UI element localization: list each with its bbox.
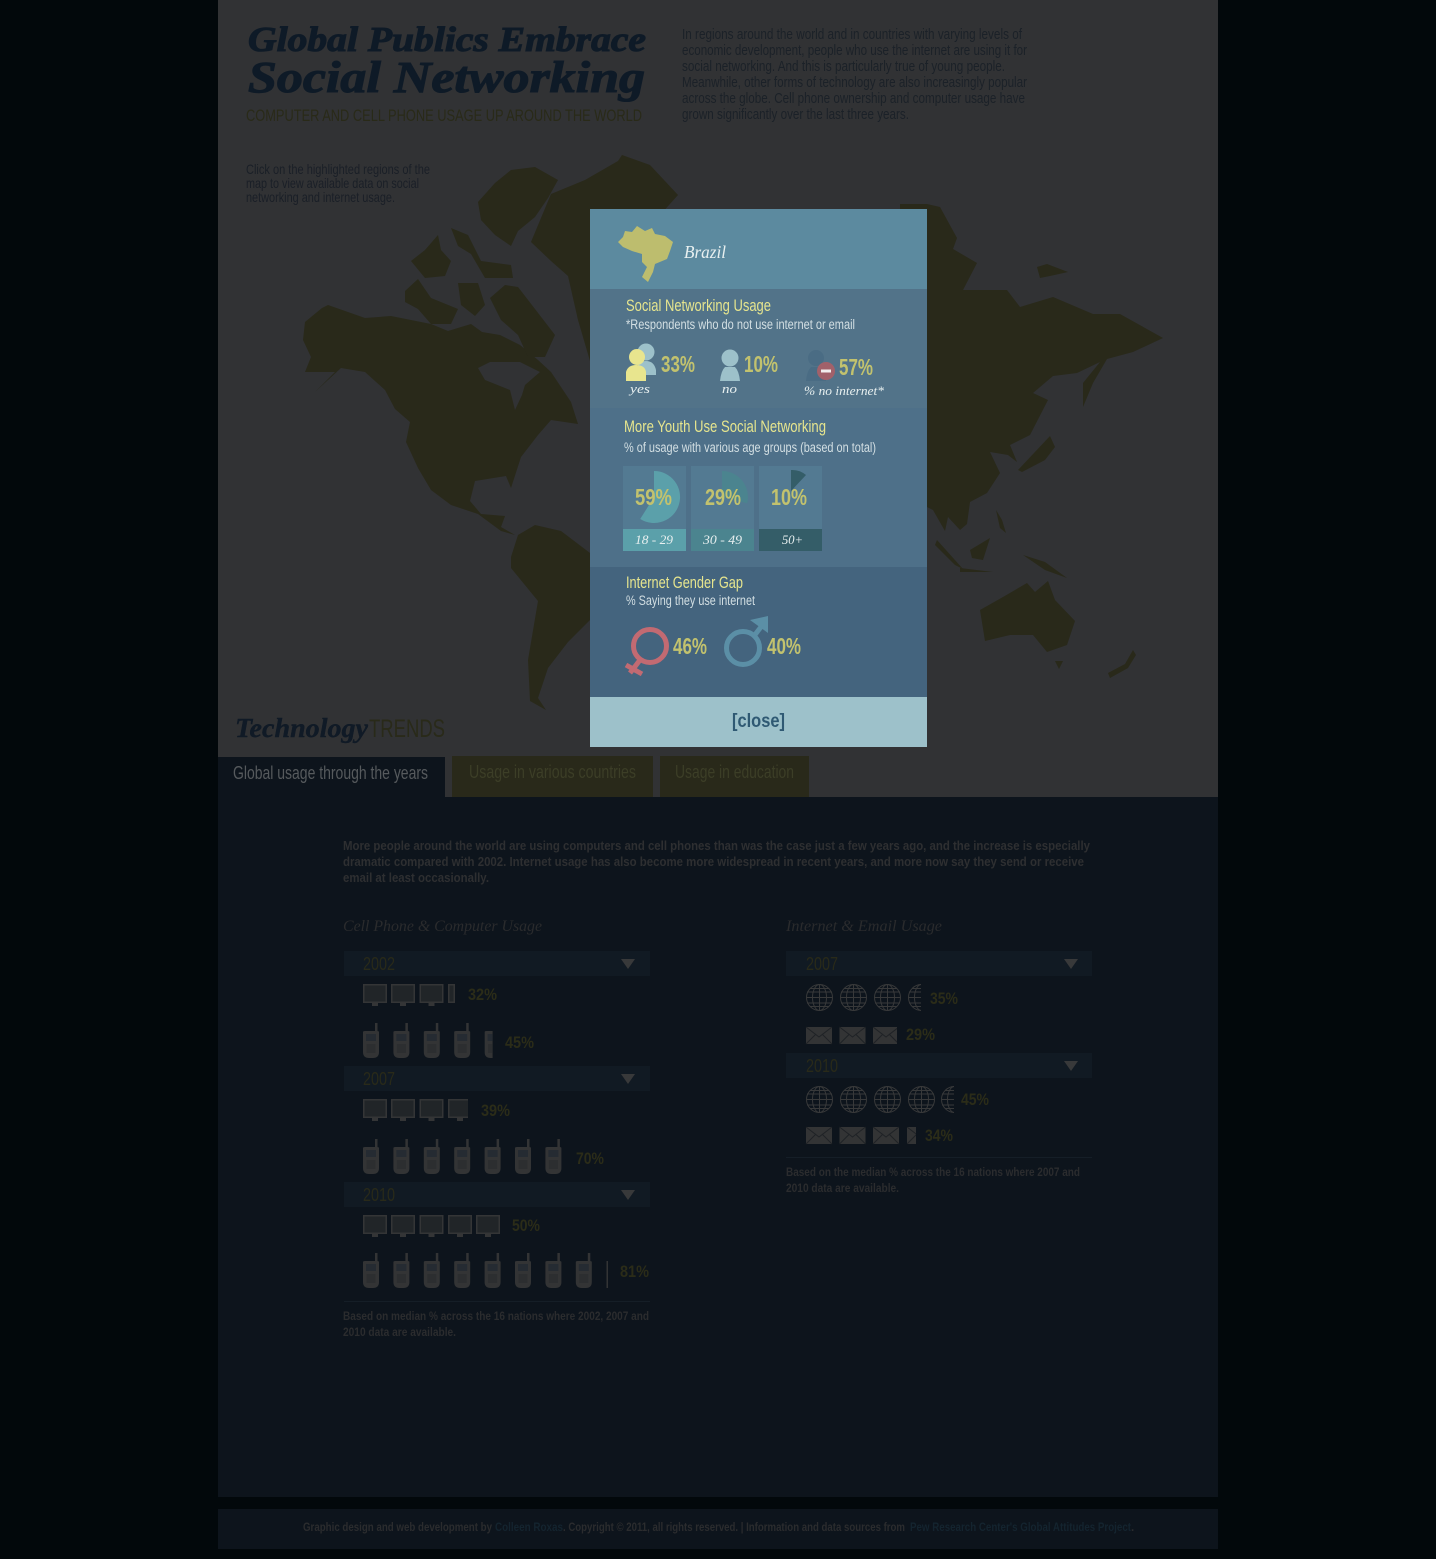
year bar 2007: 2007: [806, 954, 838, 974]
footnote: right chart: 2010 data are available.: [786, 1183, 899, 1195]
section: youth usage: More Youth Use Social Networking: [624, 418, 826, 436]
chart: internet and email usage: [786, 951, 1092, 1145]
heading: internet and email usage: Internet & Email Usage: [785, 918, 942, 935]
panel: header and map background: [218, 0, 1218, 797]
footnote: right chart: Based on the median % across the 16 nations where 2007 and: [786, 1167, 1080, 1179]
email 2010: [806, 1126, 953, 1145]
pie card 18-29: [623, 466, 686, 551]
icon: no internet person: [806, 350, 835, 381]
internet 2007: [806, 984, 958, 1010]
section: social networking usage: 57%: [839, 354, 873, 380]
close button: [590, 697, 927, 747]
intro text: economic development, people who use the internet are using it for: [682, 42, 1027, 59]
description paragraph: More people around the world are using computers and cell phones than was the case just a few years ago, and the increase is especially: [343, 838, 1091, 853]
heading: technology trends: [235, 713, 445, 743]
computers 2002: 32%: [468, 985, 497, 1004]
footer: Graphic design and web development by: [303, 1522, 493, 1534]
email 2007: 29%: [906, 1025, 935, 1044]
heading: cell phone and computer usage: Cell Phone & Computer Usage: [343, 918, 542, 935]
panel: lower dark section: [218, 797, 1218, 1497]
year bar 2010: [786, 1053, 1092, 1078]
map instruction text: Click on the highlighted regions of the: [246, 161, 430, 177]
section: social networking usage: no: [722, 381, 738, 396]
footer: [218, 1509, 1218, 1549]
intro text: In regions around the world and in countries with varying levels of: [682, 26, 1023, 43]
footer: . Copyright © 2011, all rights reserved. | Information and data sources from: [563, 1522, 905, 1534]
heading: technology trends: TRENDS: [369, 715, 445, 743]
year bar 2007: 2007: [363, 1069, 395, 1089]
year bar 2002: 2002: [363, 954, 395, 974]
map instruction text: [246, 161, 430, 205]
section: gender gap: 40%: [767, 633, 801, 659]
title: Social Networking: [248, 53, 645, 102]
tabs: Usage in education: [675, 762, 794, 782]
pie card 50+: 10%: [771, 484, 807, 510]
computers 2007: 39%: [481, 1101, 510, 1120]
section: social networking usage: *Respondents who do not use internet or email: [626, 317, 855, 332]
modal header: [590, 209, 927, 289]
section: gender gap: [590, 567, 927, 697]
year bar 2010: 2010: [806, 1056, 838, 1076]
year bar 2010: 2010: [363, 1185, 395, 1205]
chart: cell phone and computer usage: [344, 951, 650, 1288]
pie card 50+: [759, 466, 822, 551]
footnote: left chart: 2010 data are available.: [343, 1327, 456, 1339]
intro text: across the globe. Cell phone ownership and computer usage have: [682, 90, 1025, 107]
tabs: Global usage through the years: [233, 763, 428, 783]
phones 2002: [363, 1023, 534, 1058]
intro text: grown significantly over the last three years.: [682, 106, 909, 123]
tabs: Usage in various countries: [469, 762, 636, 782]
panel: Brazil modal: [590, 209, 927, 747]
icon: female symbol: [626, 630, 666, 674]
year bar 2007: [344, 1066, 650, 1091]
title: Global Publics Embrace: [248, 20, 646, 59]
map instruction text: networking and internet usage.: [246, 189, 395, 205]
tabs: [218, 756, 809, 797]
internet 2010: [806, 1086, 989, 1112]
footnote: left chart: Based on median % across the 16 nations where 2002, 2007 and: [343, 1311, 649, 1323]
footer: .: [1131, 1522, 1134, 1534]
intro text: social networking. And this is particularly true of young people.: [682, 58, 1005, 75]
phones 2002: 45%: [505, 1033, 534, 1052]
description paragraph: email at least occasionally.: [343, 870, 489, 885]
section: gender gap: % Saying they use internet: [626, 593, 755, 608]
year bar 2002: [344, 951, 650, 976]
icon: male symbol: [726, 616, 768, 664]
intro text: [682, 26, 1027, 123]
icon: Brazil map: [618, 226, 673, 282]
pie card 30-49: 29%: [705, 484, 741, 510]
description paragraph: [343, 838, 1091, 885]
section: social networking usage: Social Networking Usage: [626, 297, 771, 315]
pie card 30-49: 30 - 49: [702, 532, 743, 547]
year bar 2010: [344, 1182, 650, 1207]
intro text: Meanwhile, other forms of technology are also increasingly popular: [682, 74, 1027, 91]
subtitle: COMPUTER AND CELL PHONE USAGE UP AROUND THE WORLD: [246, 106, 642, 125]
footnote: left chart: [343, 1311, 649, 1339]
footer: Pew Research Center's Global Attitudes Project: [910, 1522, 1131, 1534]
computers 2010: 50%: [512, 1216, 540, 1235]
footnote: right chart: [786, 1167, 1080, 1195]
section: youth usage: [590, 408, 927, 567]
section: social networking usage: yes: [628, 381, 650, 396]
computers 2010: [363, 1215, 540, 1237]
description paragraph: dramatic compared with 2002. Internet usage has also become more widespread in recent years, and more now say they send or receive: [343, 854, 1084, 869]
section: social networking usage: [590, 289, 927, 408]
computers 2002: [363, 984, 497, 1006]
map instruction text: map to view available data on social: [246, 175, 419, 191]
title: [248, 20, 646, 102]
computers 2007: [363, 1099, 510, 1121]
phones 2007: [363, 1139, 604, 1174]
country name: Brazil: [684, 242, 726, 262]
pie card 30-49: [691, 466, 754, 551]
footer: Colleen Roxas: [495, 1522, 563, 1534]
close button: [close]: [732, 711, 785, 732]
section: social networking usage: % no internet*: [804, 383, 885, 398]
phones 2010: 81%: [620, 1262, 649, 1281]
pie card 50+: 50+: [782, 532, 803, 547]
world map: [303, 155, 1163, 710]
heading: technology trends: Technology: [235, 713, 369, 743]
section: social networking usage: 33%: [661, 351, 695, 377]
section: youth usage: % of usage with various age groups (based on total): [624, 440, 876, 455]
internet 2007: 35%: [930, 989, 958, 1008]
pie card 18-29: 18 - 29: [635, 532, 674, 547]
phones 2007: 70%: [576, 1149, 604, 1168]
section: gender gap: Internet Gender Gap: [626, 574, 743, 592]
icon: yes people: [626, 344, 656, 381]
email 2007: [806, 1025, 935, 1044]
icon: no person: [720, 350, 740, 381]
email 2010: 34%: [925, 1126, 953, 1145]
phones 2010: [363, 1253, 649, 1288]
year bar 2007: [786, 951, 1092, 976]
internet 2010: 45%: [961, 1090, 989, 1109]
section: social networking usage: 10%: [744, 351, 778, 377]
pie card 18-29: 59%: [635, 484, 672, 510]
section: gender gap: 46%: [673, 633, 707, 659]
